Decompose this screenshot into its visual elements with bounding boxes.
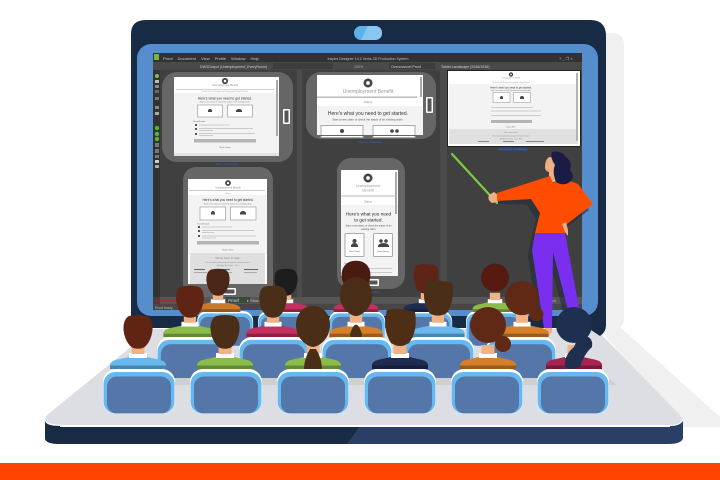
device: tablet landscape: Back ● Next — [220, 146, 231, 149]
front row chairs — [103, 369, 609, 414]
device: tablet landscape — [162, 72, 293, 162]
device: phone portrait: existing claim. — [361, 228, 376, 231]
screen: software window — [153, 53, 582, 310]
trousers — [532, 233, 580, 328]
link: desktop preview: Wireframe Landscape — [498, 147, 528, 151]
device: phone portrait: to get started. — [354, 218, 383, 222]
person — [473, 264, 517, 312]
device: desktop preview: Weekdays 8am to 5pm · Call us · Email — [500, 138, 523, 140]
title bar: ? _ ❐ × — [559, 56, 573, 61]
device: phone portrait: Claim Status — [377, 250, 390, 253]
presenter — [452, 152, 593, 336]
title bar: Proof Document View Profile Window Help — [163, 56, 260, 61]
device: desktop preview: We're here to help. — [504, 131, 518, 134]
device: phone portrait: Unemployment — [356, 184, 380, 188]
laptop lid — [131, 20, 606, 336]
device: phone landscape: Unemployment Benefit — [343, 89, 394, 95]
middle row audience — [163, 277, 549, 337]
person — [163, 286, 217, 337]
device: phone landscape: Status — [364, 100, 373, 104]
device: desktop preview: We care about providing help and support to those who need it. — [493, 134, 530, 138]
device: tablet portrait: We're here to help. — [215, 256, 241, 260]
device: phone portrait: Here's what you need — [346, 212, 391, 216]
device: tablet landscape: Here's what you need to get started. — [198, 96, 252, 100]
device: desktop preview: Unemployment Benefit — [502, 76, 521, 80]
device: phone portrait — [337, 158, 405, 289]
webcam — [354, 26, 382, 40]
person — [246, 286, 300, 337]
person — [372, 309, 428, 369]
person — [495, 281, 549, 337]
toolbar: DW3Output (Unemployment_EveryRoom) — [200, 65, 267, 69]
back row chairs — [197, 311, 522, 346]
person — [196, 269, 240, 312]
toolbar: Overchannel Proof — [391, 65, 421, 69]
bottom status bar: Proof — [228, 298, 240, 303]
bottom status bar: Proof ready — [155, 306, 173, 310]
device: tablet landscape: Start a new claim or check the status of an existing claim. — [200, 100, 251, 104]
link: tablet portrait: Tablet Portrait — [219, 297, 237, 301]
toolbar — [153, 62, 582, 70]
face and neck — [545, 157, 558, 183]
person — [110, 315, 166, 369]
person — [334, 261, 378, 312]
presenter shadow on screen — [494, 199, 589, 311]
device: phone landscape: Start a new claim or check the status of an existing claim. — [332, 118, 404, 122]
orange footer band — [0, 463, 720, 480]
device: desktop preview: Start a new claim or check the status of an existing claim. — [491, 89, 532, 92]
hair — [551, 152, 573, 184]
device: phone portrait: New Claim — [349, 251, 360, 253]
shirt — [497, 176, 593, 233]
device: desktop preview: Status Person Response Employment Payroll Taxes — [493, 81, 530, 84]
device: desktop preview: Here's what you need to get started. — [490, 86, 532, 90]
device: tablet landscape: Status Person Response Employment Payroll Taxes — [202, 90, 248, 93]
bottom status bar — [153, 296, 582, 310]
device: tablet landscape: You will need: — [193, 121, 206, 123]
column dividers — [297, 70, 302, 297]
toolbar: 100% — [354, 65, 364, 69]
device: tablet portrait: You will need: — [197, 224, 210, 226]
device: phone landscape: Here's what you need to get started. — [328, 111, 408, 117]
device: tablet portrait: Start a new claim or check the status of an existing claim. — [204, 202, 252, 206]
title bar: Inspire Designer 14.2 Vertis 3D Production System — [328, 57, 408, 61]
device: tablet portrait: Weekdays 8am to 5pm · Call us — [217, 264, 239, 267]
device: phone landscape — [306, 72, 436, 139]
person — [411, 280, 465, 337]
blue bezel — [137, 44, 598, 316]
hip hand — [562, 222, 568, 236]
device: phone portrait: Start a new claim, or check the status of an — [346, 224, 392, 228]
device: tablet portrait: Status — [225, 192, 231, 195]
link: phone landscape: Phone Landscape — [358, 140, 382, 144]
device: tablet landscape: Unemployment Benefit — [212, 83, 238, 87]
bottom status bar: 0:0 — [552, 299, 557, 303]
floor band under second row — [111, 378, 617, 385]
link: phone portrait: Phone Portrait — [360, 290, 380, 294]
middle row chairs — [157, 337, 556, 385]
device: tablet portrait: Unemployment Benefit — [215, 186, 241, 190]
foot — [545, 328, 552, 336]
background shadow of laptop — [600, 33, 720, 427]
device: phone portrait: You will need: — [344, 263, 358, 265]
laptop base — [45, 329, 683, 444]
person — [197, 315, 253, 369]
device: tablet portrait — [183, 167, 273, 297]
person — [264, 269, 308, 312]
device: tablet portrait: Here's what you need to get started. — [202, 198, 254, 202]
person — [329, 277, 383, 337]
link: tablet landscape: Tablet Landscape — [215, 162, 239, 166]
pointer stick — [452, 154, 497, 203]
title bar — [153, 53, 582, 62]
hand — [488, 192, 498, 203]
back row audience — [196, 261, 517, 312]
bottom status bar: ▸ Share — [247, 298, 262, 303]
person — [546, 307, 602, 369]
device: desktop preview: Back ● Next — [507, 126, 516, 128]
device: desktop preview — [448, 70, 580, 146]
person — [285, 306, 341, 369]
left tool strip — [153, 70, 160, 297]
toolbar: Tablet Landscape (2048/1536) — [441, 65, 490, 69]
device: tablet portrait: We care about providing help and support to those who need it. — [206, 261, 251, 264]
person — [404, 264, 448, 312]
bottom status bar: Unemployment — [155, 299, 183, 303]
device: phone portrait: Status — [364, 200, 373, 204]
device: tablet portrait: Back ● Next — [223, 248, 234, 252]
device: phone portrait: Benefit — [362, 188, 374, 192]
front row audience — [110, 306, 602, 369]
person — [460, 307, 516, 369]
